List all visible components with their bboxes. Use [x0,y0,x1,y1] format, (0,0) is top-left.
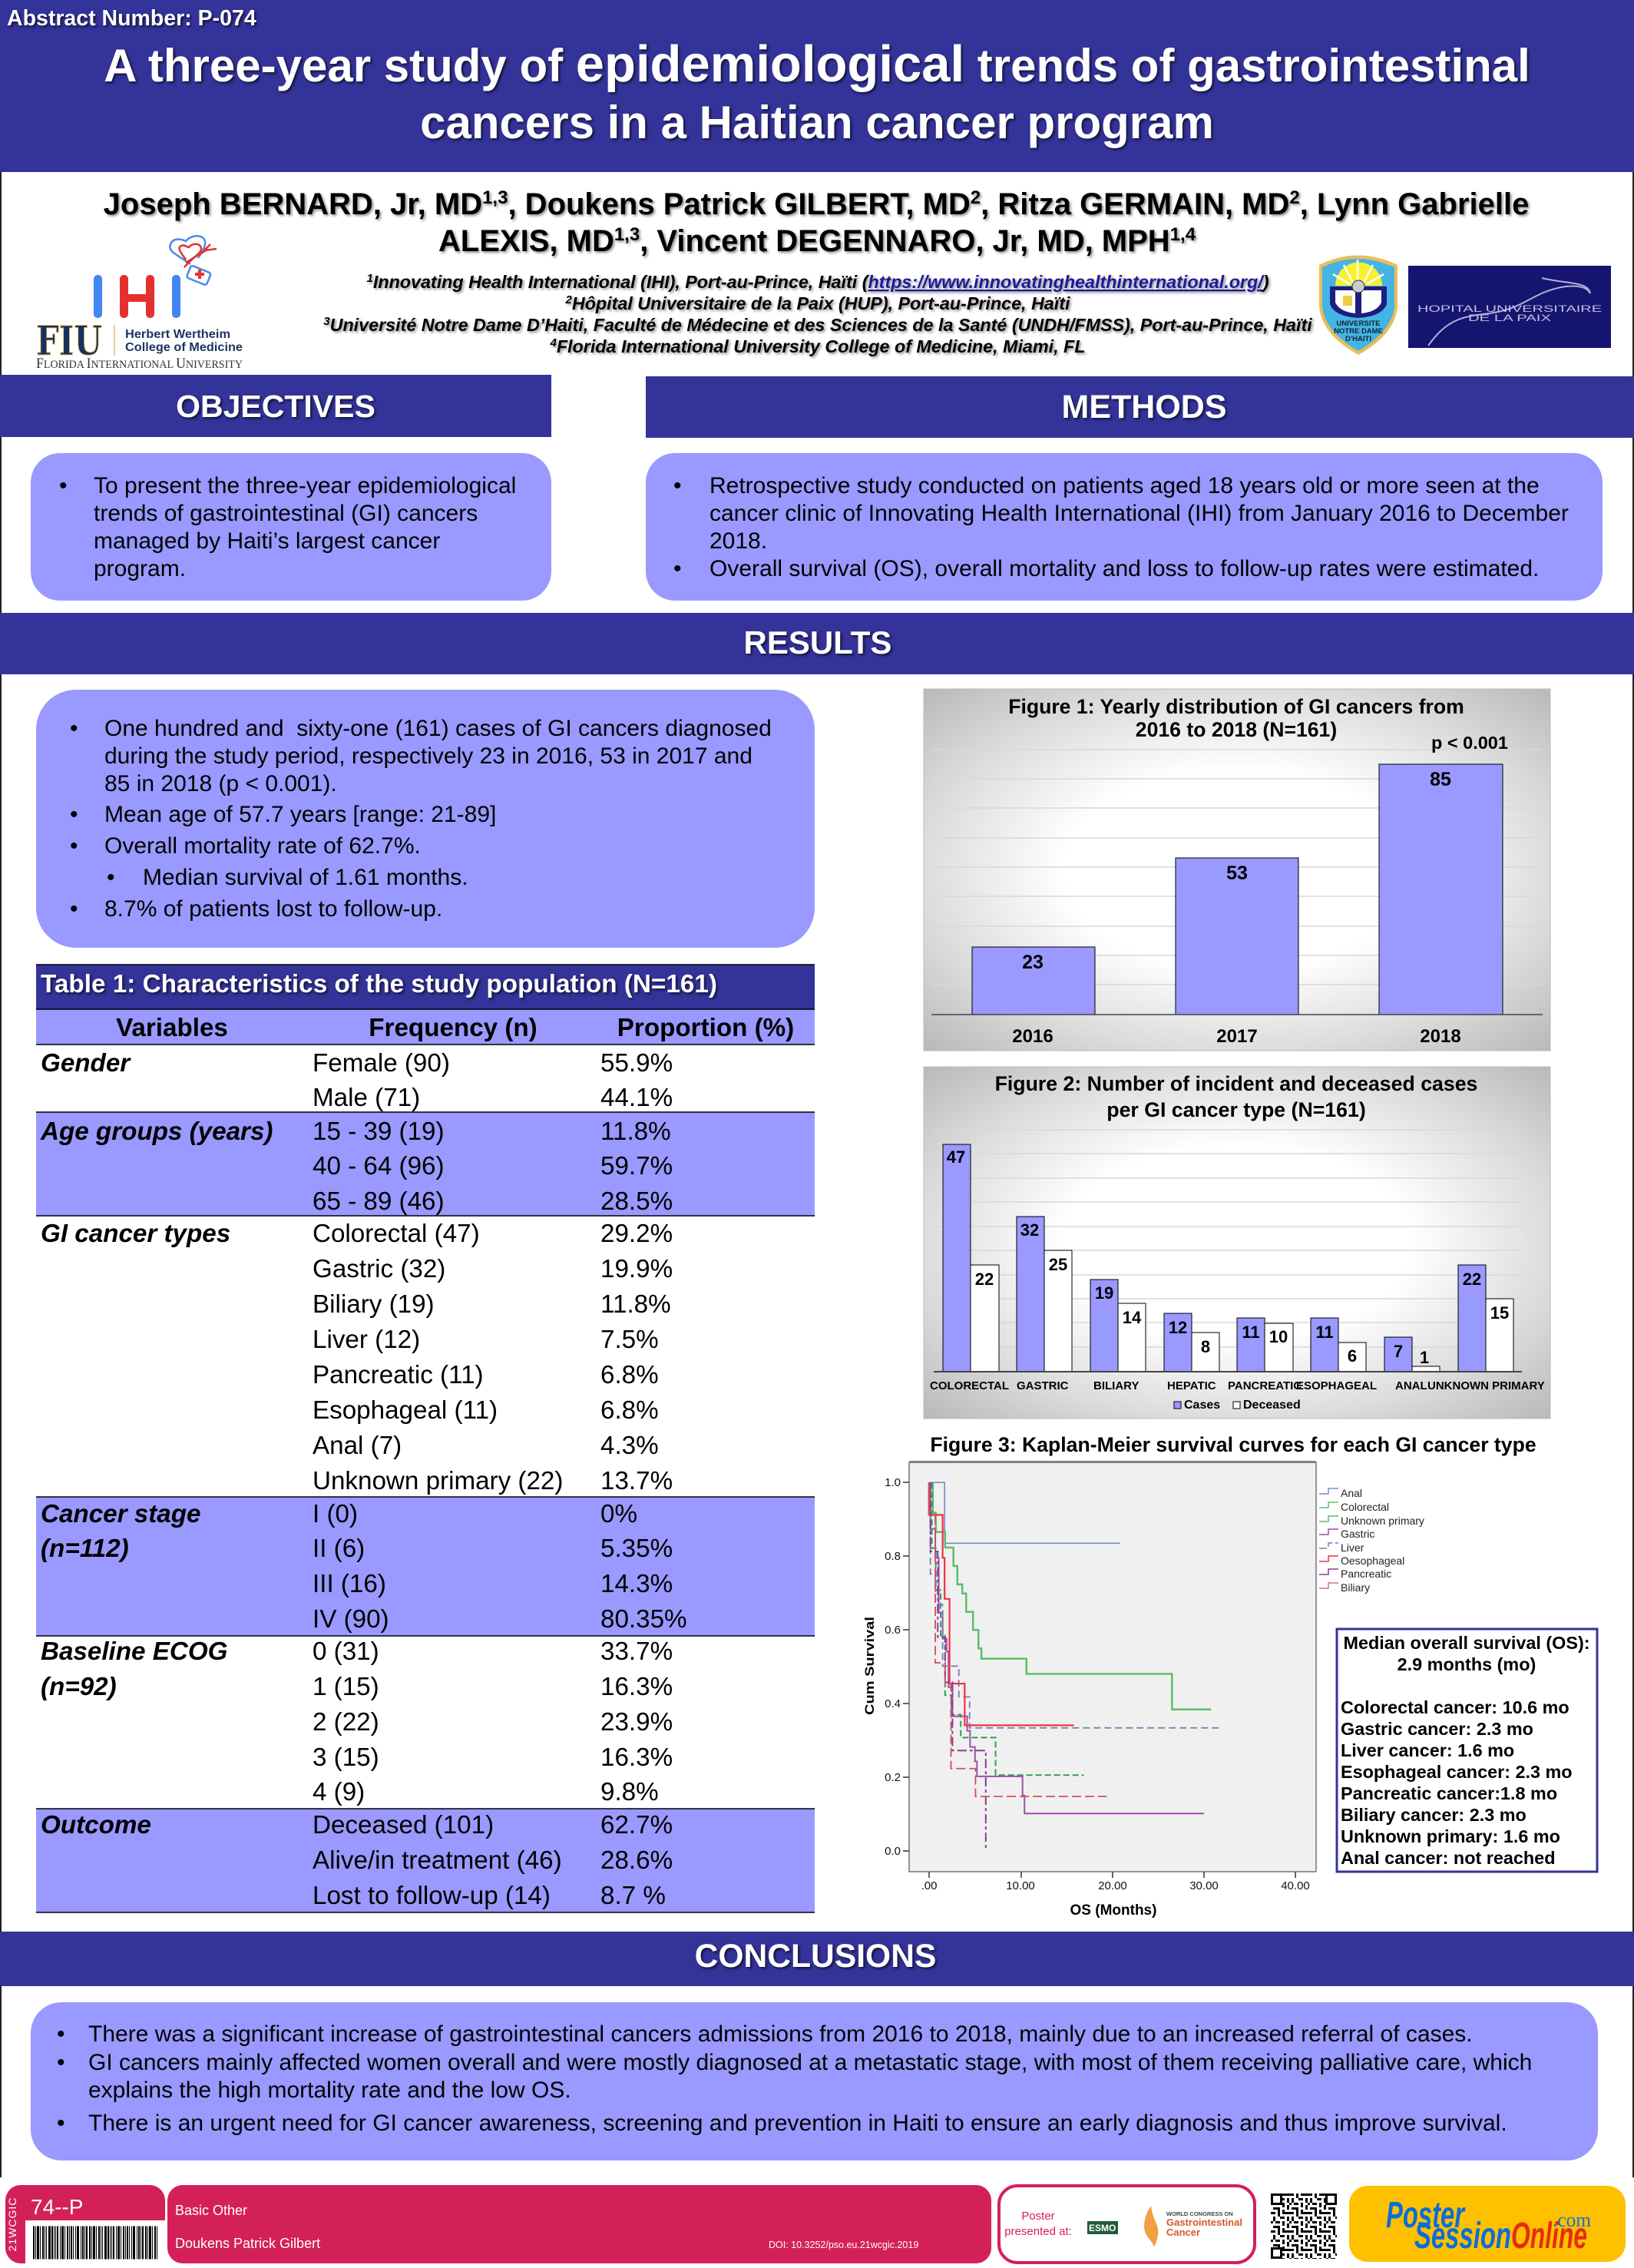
section header: results [0,613,1634,674]
authors: 1,3 [482,187,508,208]
axis tick labels: 0.2 [885,1771,901,1784]
bar values: 8 [1201,1337,1210,1356]
survival legend: Pancreatic [1341,1568,1391,1580]
section header: methods: METHODS [1061,389,1227,425]
panel: results summary: during the study period, respectively 23 in 2016, 53 in 2017 and [104,743,752,769]
category labels: PANCREATIC [1228,1379,1302,1392]
bar values: 25 [1049,1255,1067,1274]
category labels: ANAL [1395,1379,1427,1392]
row group: baseline ECOG [41,1637,673,1806]
row group: cancer stage: 80.35% [600,1605,687,1634]
bar values: 32 [1020,1220,1039,1240]
callout: median overall survival: Esophageal cancer: 2.3 mo [1341,1762,1573,1782]
row group: GI cancer types: Anal (7) [313,1432,402,1460]
affiliations: 2 [565,293,573,306]
bar values: 6 [1348,1346,1357,1366]
x axis title: OS (Months) [1070,1902,1156,1919]
callout: median overall survival: Pancreatic cancer:1.8 mo [1341,1783,1557,1803]
logo: Hopital Universitaire de la Paix: DE LA PAIX [1468,313,1551,323]
bar values: 11 [1242,1323,1260,1342]
row group: cancer stage: 5.35% [600,1535,673,1563]
row group: gender: Male (71) [313,1084,420,1112]
axis tick labels: 0.8 [885,1550,901,1563]
row group: GI cancer types [41,1220,673,1495]
authors: , Vincent DEGENNARO, Jr, MD, MPH [640,224,1170,258]
row group: age groups: Age groups (years) [40,1117,273,1146]
row group: GI cancer types: 4.3% [600,1432,659,1460]
bar values: 47 [947,1147,965,1167]
table title: Table 1: Characteristics of the study population (N=161) [41,970,717,998]
footer: presented at: WORLD CONGRESS ON [1166,2210,1233,2217]
row group: baseline ECOG: 2 (22) [313,1708,379,1737]
panel: conclusions text: • [57,2021,65,2047]
footer: PosterSessionOnline logo [1349,2186,1626,2262]
row group: baseline ECOG: 33.7% [600,1637,673,1666]
row group: baseline ECOG: 1 (15) [313,1673,379,1701]
category labels: BILIARY [1093,1379,1139,1392]
affiliations: Florida International University College of Medicine, Miami, FL [557,336,1086,356]
title [104,35,1530,148]
section header: conclusions: CONCLUSIONS [695,1938,936,1975]
bar values and years: 85 [1430,769,1451,790]
footer: PosterSessionOnline logo: .com [1553,2209,1591,2231]
panel: methods text: cancer clinic of Innovating Health International (IHI) from January 2016 to December [710,501,1569,526]
figure 2 title [995,1072,1477,1121]
row group: outcome [36,1809,815,1912]
affiliations: 3 [323,315,330,328]
authors: , Doukens Patrick GILBERT, MD [508,187,971,221]
bars [972,764,1503,1015]
y axis title: Cum Survival [862,1617,877,1715]
bar values: 19 [1095,1283,1113,1303]
authors: 2 [1289,187,1300,208]
bar values: 15 [1490,1303,1509,1323]
row group: age groups [36,1112,815,1216]
panel: results summary: • [70,833,78,859]
panel: methods text: • [673,473,682,498]
legend: Deceased [1243,1399,1301,1412]
row group: cancer stage: 14.3% [600,1570,673,1598]
row group: baseline ECOG: (n=92) [41,1673,117,1701]
logo: FIU Herbert Wertheim College of Medicine: College of Medicine [125,341,243,354]
bar values: 10 [1269,1327,1288,1346]
panel: objectives text [31,453,551,601]
footer: presented at: ESMO [1089,2223,1116,2233]
row group: GI cancer types: Pancreatic (11) [313,1361,484,1389]
panel: methods text: • [673,556,682,581]
survival legend: Biliary [1341,1581,1370,1594]
affiliations: Hôpital Universitaire de la Paix (HUP), Port-au-Prince, Haïti [572,293,1070,313]
row group: GI cancer types: 6.8% [600,1361,659,1389]
panel: conclusions text: explains the high mortality rate and the low OS. [88,2078,571,2103]
panel: results summary [36,690,815,948]
authors: Joseph BERNARD, Jr, MD [104,187,482,221]
row group: GI cancer types: 19.9% [600,1255,673,1283]
panel: results summary: • [70,716,78,741]
bar values: 1 [1420,1348,1429,1367]
footer: presented at: Gastrointestinal [1166,2217,1242,2228]
row group: GI cancer types: 11.8% [600,1290,671,1319]
title: A three-year study of epidemiological trends of gastrointestinal [104,35,1530,93]
panel: methods text: 2018. [710,528,767,554]
bar values and years: 2018 [1420,1026,1461,1047]
category labels: GASTRIC [1017,1379,1069,1392]
survival legend: Anal [1341,1487,1362,1499]
footer: QR code [1271,2194,1337,2259]
callout: median overall survival: Gastric cancer: 2.3 mo [1341,1719,1533,1739]
row group: baseline ECOG: 0 (31) [313,1637,379,1666]
abstract number: Abstract Number: P-074 [7,6,256,31]
legend [1174,1399,1301,1412]
panel: conclusions text: GI cancers mainly affected women overall and were mostly diagnosed at a metastatic stage, with most of them receiving palliative care, which [88,2050,1532,2075]
section header: objectives [0,375,551,437]
footer: session and author bar: DOI: 10.3252/pso.eu.21wcgic.2019 [769,2240,918,2250]
row group: outcome: 8.7 % [600,1882,666,1910]
bar values: 14 [1123,1308,1142,1327]
deceased bars [971,1250,1513,1372]
survival curves [929,1482,1221,1851]
logo: Universite Notre Dame d'Haiti shield: D'HAITI [1345,335,1371,343]
affiliations: 4 [549,336,557,349]
survival legend: Liver [1341,1541,1364,1554]
row group: age groups: 59.7% [600,1152,673,1180]
cases bars [943,1144,1486,1372]
axis tick labels: 1.0 [885,1476,901,1489]
header banner [0,0,1634,172]
figure 3 title: Figure 3: Kaplan-Meier survival curves for each GI cancer type [930,1433,1536,1456]
panel: results summary: • [70,896,78,922]
row group: outcome: 28.6% [600,1846,673,1875]
p value: p < 0.001 [1431,733,1508,753]
footer: PosterSessionOnline logo: Poster [1386,2195,1466,2236]
logo: FIU Herbert Wertheim College of Medicine: FIU [36,318,102,365]
axis tick labels [885,1476,1310,1892]
authors: , Ritza GERMAIN, MD [981,187,1289,221]
figure 1 title: 2016 to 2018 (N=161) [1136,718,1337,741]
footer: PosterSessionOnline logo: Online [1511,2216,1587,2256]
logo: Hopital Universitaire de la Paix [1408,266,1611,348]
row group: gender: Female (90) [313,1049,450,1078]
callout: median overall survival: Biliary cancer: 2.3 mo [1341,1805,1526,1825]
row group: gender: 55.9% [600,1049,673,1078]
table 1: characteristics of the study population [36,965,815,1912]
row group: GI cancer types: Esophageal (11) [313,1396,498,1425]
chart: figure 2 incident and deceased cases [924,1067,1550,1419]
row group: gender [41,1049,673,1112]
callout: median overall survival: 2.9 months (mo) [1398,1654,1536,1674]
footer: presented at: presented at: [1004,2225,1072,2238]
panel: conclusions text: • [57,2111,65,2136]
footer: poster id tag: 21WCGIC [6,2197,18,2251]
table header row: Proportion (%) [617,1014,794,1042]
row group: gender: 44.1% [600,1084,673,1112]
row group: baseline ECOG: 16.3% [600,1673,673,1701]
row group: baseline ECOG: 4 (9) [313,1778,365,1806]
authors: ALEXIS, MD [438,224,614,258]
callout: median overall survival: Median overall survival (OS): [1343,1633,1590,1653]
callout: median overall survival: Unknown primary: 1.6 mo [1341,1826,1560,1846]
callout: median overall survival: Anal cancer: not reached [1341,1848,1555,1868]
figure 1 title: Figure 1: Yearly distribution of GI cancers from [1008,695,1464,718]
figure 2 title: Figure 2: Number of incident and deceased cases [995,1072,1477,1095]
figure 2 title: per GI cancer type (N=161) [1106,1098,1366,1121]
row group: cancer stage: III (16) [313,1570,386,1598]
row group: GI cancer types: 6.8% [600,1396,659,1425]
authors: 1,3 [614,224,640,245]
row group: baseline ECOG: 23.9% [600,1708,673,1737]
panel: results summary: • [107,865,115,890]
panel: results summary: Mean age of 57.7 years [range: 21-89] [104,802,496,827]
table header row: Variables [116,1014,228,1042]
chart: figure 3 Kaplan-Meier survival curves [862,1433,1597,1919]
logo: Hopital Universitaire de la Paix: HOPITAL UNIVERSITAIRE [1417,303,1602,314]
row group: outcome: Alive/in treatment (46) [313,1846,562,1875]
callout: median overall survival: Liver cancer: 1.6 mo [1341,1740,1514,1760]
chart: figure 1 yearly distribution [924,689,1550,1051]
logo: FIU Herbert Wertheim College of Medicine [36,318,243,372]
table header row [36,1009,815,1045]
bar values: 7 [1394,1342,1403,1361]
survival legend: Gastric [1341,1528,1374,1540]
axis tick labels: .00 [921,1879,937,1892]
section header: methods [646,376,1634,438]
bar values [947,1147,1509,1367]
logo: FIU Herbert Wertheim College of Medicine: FLORIDA INTERNATIONAL UNIVERSITY [36,356,243,372]
legend: Cases [1184,1399,1220,1412]
logo: IHI [94,236,217,318]
panel: results summary: Overall mortality rate of 62.7%. [104,833,421,859]
category labels: HEPATIC [1167,1379,1216,1392]
footer: session and author bar [167,2185,991,2263]
callout: median overall survival [1337,1629,1597,1872]
bar values: 22 [975,1270,994,1289]
axis tick labels: 30.00 [1189,1879,1219,1892]
category labels: ESOPHAGEAL [1296,1379,1377,1392]
panel: methods text: Overall survival (OS), overall mortality and loss to follow-up rates were estimated. [710,556,1539,581]
survival legend: Oesophageal [1341,1554,1404,1567]
section header: objectives: OBJECTIVES [176,389,375,424]
row group: GI cancer types: Gastric (32) [313,1255,445,1283]
category labels: COLORECTAL [930,1379,1009,1392]
authors: 2 [971,187,981,208]
authors: , Lynn Gabrielle [1300,187,1529,221]
panel: objectives text: trends of gastrointestinal (GI) cancers [94,501,478,526]
panel: results summary: 85 in 2018 (p < 0.001). [104,771,337,796]
bar values: 22 [1463,1270,1481,1289]
row group: GI cancer types: Liver (12) [313,1326,420,1354]
bar values and years: 2016 [1012,1026,1054,1047]
bar values and years [1012,769,1461,1047]
axis tick labels: 0.6 [885,1624,901,1637]
logo: Universite Notre Dame d'Haiti shield: UNIVERSITE [1336,320,1381,328]
survival legend [1319,1487,1424,1594]
affiliations: Université Notre Dame D’Haiti, Faculté de Médecine et des Sciences de la Santé (UNDH/FMSS), Port-au-Prince, Haïti [330,315,1312,335]
survival legend: Unknown primary [1341,1515,1424,1527]
axis tick labels: 40.00 [1281,1879,1310,1892]
panel: objectives text: program. [94,556,186,581]
row group: GI cancer types: Unknown primary (22) [313,1467,563,1495]
callout: median overall survival: Colorectal cancer: 10.6 mo [1341,1697,1570,1717]
figure 1 title [1008,695,1464,741]
bar values and years: 23 [1022,952,1044,973]
logo: FIU Herbert Wertheim College of Medicine: Herbert Wertheim [125,328,230,341]
footer: poster id tag [5,2185,165,2263]
authors [104,187,1529,258]
row group: baseline ECOG: 9.8% [600,1778,659,1806]
survival legend: Colorectal [1341,1501,1389,1513]
panel: objectives text: To present the three-year epidemiological [94,473,516,498]
bar values and years: 2017 [1216,1026,1258,1047]
row group: baseline ECOG: 3 (15) [313,1743,379,1772]
logo: Universite Notre Dame d'Haiti shield: NOTRE DAME [1334,327,1383,336]
panel: methods text: Retrospective study conducted on patients aged 18 years old or more seen at the [710,473,1540,498]
footer: session and author bar: Doukens Patrick Gilbert [175,2236,320,2251]
panel: conclusions text: There was a significant increase of gastrointestinal cancers admissions from 2016 to 2018, mainly due to an increased referral of cases. [88,2021,1473,2047]
row group: GI cancer types: 29.2% [600,1220,673,1248]
row group: outcome: Outcome [41,1811,151,1839]
footer: presented at: Cancer [1166,2227,1200,2238]
logo: Universite Notre Dame d'Haiti shield [1319,255,1398,355]
panel: results summary: 8.7% of patients lost to follow-up. [104,896,442,922]
panel: conclusions text: • [57,2050,65,2075]
axis tick labels: 0.4 [885,1697,901,1710]
panel: results summary: Median survival of 1.61 months. [143,865,468,890]
authors: 1,4 [1170,224,1196,245]
affiliations: Innovating Health International (IHI), Port-au-Prince, Haïti ( [373,272,870,292]
row group: cancer stage: (n=112) [41,1535,129,1563]
row group: cancer stage: IV (90) [313,1605,389,1634]
row group: outcome: 62.7% [600,1811,673,1839]
bar values and years: 53 [1226,863,1248,884]
row group: age groups: 15 - 39 (19) [313,1117,445,1146]
footer: poster id tag: 74--P [31,2195,83,2219]
table title [36,965,815,1009]
row group: baseline ECOG: Baseline ECOG [41,1637,227,1666]
row group: GI cancer types: 13.7% [600,1467,673,1495]
category labels: UNKNOWN PRIMARY [1427,1379,1545,1392]
category labels [930,1379,1545,1392]
panel: methods text [646,453,1603,601]
affiliations: 1 [367,272,373,285]
row group: GI cancer types: 7.5% [600,1326,659,1354]
row group: cancer stage: I (0) [313,1500,358,1528]
row group: cancer stage [36,1497,815,1636]
panel: results summary: • [70,802,78,827]
row group: GI cancer types: Colorectal (47) [313,1220,480,1248]
row group: age groups: 40 - 64 (96) [313,1152,445,1180]
title: cancers in a Haitian cancer program [420,97,1214,148]
axis tick labels: 20.00 [1098,1879,1127,1892]
row group: outcome: Deceased (101) [313,1811,494,1839]
panel: results summary: One hundred and sixty-one (161) cases of GI cancers diagnosed [104,716,772,741]
row group: age groups: 28.5% [600,1187,673,1216]
row group: outcome: Lost to follow-up (14) [313,1882,551,1910]
bar values: 11 [1315,1323,1334,1342]
affiliations [323,272,1312,356]
row group: age groups: 11.8% [600,1117,671,1146]
row group: GI cancer types: GI cancer types [41,1220,230,1248]
panel: objectives text: managed by Haiti’s largest cancer [94,528,440,554]
row group: gender: Gender [41,1049,131,1078]
row group: age groups: 65 - 89 (46) [313,1187,445,1216]
footer: presented at: Poster [1021,2210,1055,2223]
table header row: Frequency (n) [369,1014,538,1042]
footer: session and author bar: Basic Other [175,2203,247,2218]
row group: cancer stage: 0% [600,1500,637,1528]
panel: conclusions text [31,2002,1598,2160]
bar values: 12 [1169,1318,1187,1337]
axis tick labels: 10.00 [1006,1879,1035,1892]
footer: presented at [999,2186,1255,2263]
row group: GI cancer types: Biliary (19) [313,1290,435,1319]
axis tick labels: 0.0 [885,1845,901,1858]
plot area [903,1461,1316,1878]
panel: conclusions text: There is an urgent need for GI cancer awareness, screening and prevention in Haiti to ensure an early diagnosis and thus improve survival. [88,2111,1507,2136]
section header: results: RESULTS [744,624,891,661]
row group: baseline ECOG: 16.3% [600,1743,673,1772]
panel: objectives text: • [59,473,68,498]
affiliations: https://www.innovatinghealthinternational.org/) [868,272,1268,292]
row group: cancer stage: Cancer stage [41,1500,200,1528]
section header: conclusions [0,1932,1634,1986]
barcode [33,2226,158,2260]
row group: cancer stage: II (6) [313,1535,365,1563]
footer: PosterSessionOnline logo: Session [1414,2216,1511,2256]
